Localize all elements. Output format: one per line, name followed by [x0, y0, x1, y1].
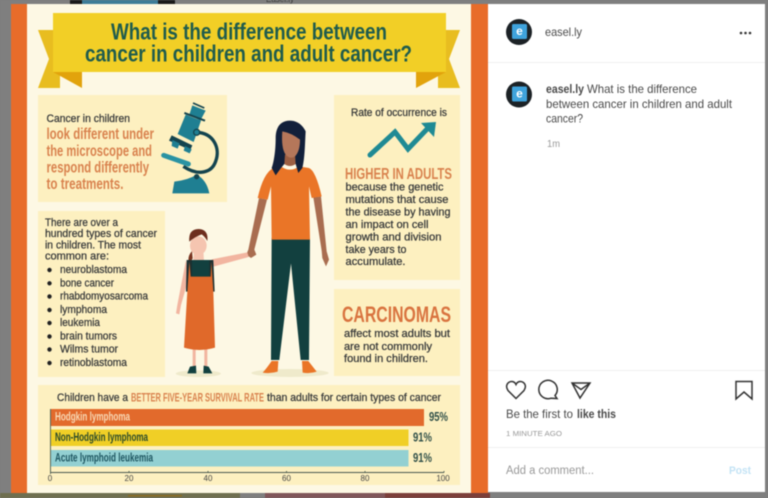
chart axis: 60	[282, 474, 291, 483]
cancer list: retinoblastoma	[60, 357, 127, 369]
label: Rate of occurrence is	[351, 107, 448, 119]
panel: cancer in children	[38, 95, 227, 202]
post caption	[506, 82, 733, 150]
icon: caption avatar: e	[516, 86, 523, 100]
intro paragraph: There are over a	[45, 217, 118, 229]
orange highlight text: to treatments.	[46, 176, 124, 193]
icon: comment	[539, 380, 557, 399]
icon: caption avatar	[506, 82, 532, 108]
cancer list: lymphoma	[60, 304, 107, 316]
likes line: like this	[577, 407, 616, 421]
explanation: accumulate.	[346, 256, 406, 268]
bar: Non-Hodgkin lymphoma 91%: 91%	[413, 430, 432, 444]
caption text: cancer?	[546, 112, 583, 126]
icon: rising arrow	[370, 122, 436, 155]
action icons	[507, 380, 752, 399]
bar: Non-Hodgkin lymphoma 91%	[51, 430, 432, 446]
banner right fold	[416, 72, 446, 88]
chart title: Children have a	[57, 392, 128, 404]
chart axis	[48, 409, 450, 483]
icon: microscope	[164, 103, 217, 193]
orange highlight text: look different under	[46, 126, 154, 143]
likes line: Be the first to	[506, 407, 573, 421]
caption text: easel.ly	[546, 82, 584, 96]
explanation: found in children.	[344, 353, 428, 365]
caption text: What is the difference	[587, 82, 697, 96]
chart title	[57, 390, 441, 404]
figure: child	[176, 229, 249, 377]
explanation: are not commonly	[344, 341, 433, 353]
intro paragraph: common are:	[45, 250, 109, 262]
woman legs and feet	[251, 238, 329, 377]
panel: survival rate chart	[38, 385, 460, 485]
timestamp: 1m	[547, 139, 560, 150]
icon: share	[572, 383, 590, 398]
cancer list: rhabdomyosarcoma	[60, 290, 148, 302]
title banner	[38, 13, 460, 88]
bar: Hodgkin lymphoma 95%	[51, 409, 448, 426]
intro paragraph: hundred types of cancer	[45, 228, 157, 240]
explanation: take years to	[346, 244, 406, 256]
chart axis: 80	[361, 474, 370, 483]
caption text	[546, 82, 733, 126]
heading: CARCINOMAS	[342, 302, 451, 327]
cancer list: neuroblastoma	[60, 264, 127, 276]
panel: carcinomas	[334, 289, 460, 376]
chart axis: 40	[204, 474, 213, 483]
panel: rate of occurrence	[334, 95, 460, 280]
title line 1: What is the difference between	[111, 18, 387, 44]
bar: Acute lymphoid leukemia 91%	[51, 450, 432, 466]
post time: 1 MINUTE AGO	[506, 429, 562, 438]
bar: Acute lymphoid leukemia 91%: Acute lymphoid leukemia	[55, 452, 153, 464]
banner right tail	[438, 30, 460, 88]
woman torso and head	[246, 121, 329, 266]
icon: bookmark	[736, 382, 752, 399]
cancer list: brain tumors	[60, 330, 118, 342]
comment input: Add a comment...	[506, 465, 594, 477]
intro paragraph: in children. The most	[45, 240, 141, 252]
explanation: mutations that cause	[346, 194, 448, 206]
explanation	[344, 328, 450, 365]
heading: HIGHER IN ADULTS	[345, 166, 452, 183]
caption text: between cancer in children and adult	[546, 97, 733, 111]
chart axis: 20	[125, 474, 134, 483]
cancer list: leukemia	[60, 317, 100, 329]
bar: Hodgkin lymphoma 95%: Hodgkin lymphoma	[55, 412, 130, 424]
intro text: Cancer in children	[46, 113, 130, 125]
comment input: Post	[729, 465, 751, 477]
explanation: because the genetic	[346, 182, 444, 194]
banner left fold	[53, 72, 82, 88]
chart axis: 100	[436, 474, 450, 483]
comment input	[506, 465, 751, 477]
bar: Non-Hodgkin lymphoma 91%: Non-Hodgkin lymphoma	[55, 432, 148, 444]
banner ribbon	[53, 13, 446, 72]
icon: heart	[507, 381, 525, 398]
likes line	[506, 407, 616, 421]
cancer list: Wilms tumor	[60, 344, 118, 356]
chart title: BETTER FIVE-YEAR SURVIVAL RATE	[131, 390, 264, 404]
illustration: woman holding child's hand	[176, 121, 329, 377]
intro paragraph	[45, 217, 157, 262]
title line 2: cancer in children and adult cancer?	[85, 40, 412, 66]
explanation: an impact on cell	[346, 219, 428, 231]
explanation: growth and division	[346, 232, 442, 244]
explanation: affect most adults but	[344, 328, 450, 340]
orange highlight text	[46, 126, 154, 193]
figure: woman	[246, 121, 329, 377]
username: easel.ly	[545, 25, 582, 39]
banner left tail	[38, 30, 60, 88]
icon: profile avatar	[506, 19, 532, 45]
icon: more options	[740, 32, 751, 34]
explanation	[346, 182, 450, 268]
orange highlight text: respond differently	[46, 160, 149, 176]
panel: types of childhood cancer	[38, 211, 165, 377]
chart axis: 0	[48, 474, 53, 483]
bar: Acute lymphoid leukemia 91%: 91%	[413, 451, 432, 465]
cancer list	[47, 264, 148, 369]
bar: Hodgkin lymphoma 95%: 95%	[429, 410, 448, 424]
icon: profile avatar: e	[516, 24, 523, 38]
orange highlight text: the microscope and	[46, 143, 152, 160]
cancer list: bone cancer	[60, 278, 114, 290]
panel: social post sidebar	[488, 4, 765, 492]
explanation: the disease by having	[346, 206, 450, 218]
chart title: than adults for certain types of cancer	[267, 392, 441, 404]
post header	[506, 19, 751, 45]
infographic sheet	[11, 4, 488, 493]
